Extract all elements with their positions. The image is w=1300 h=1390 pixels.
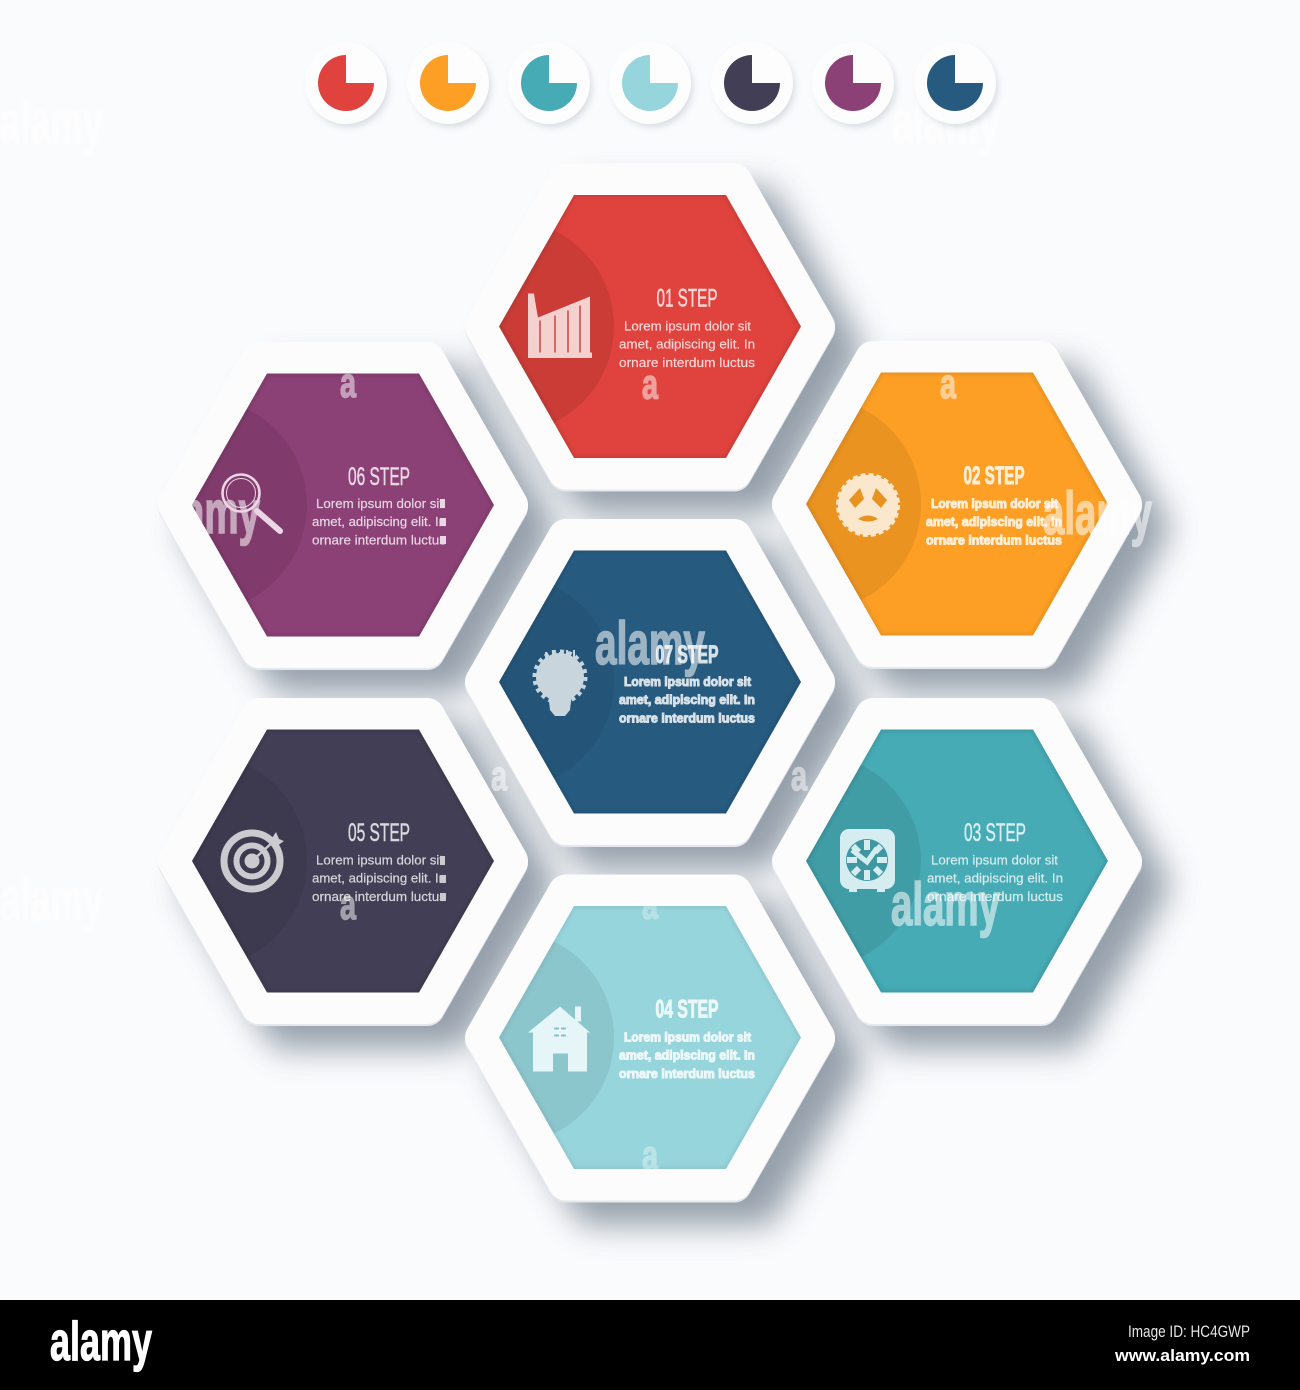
text: 01 description: amet, adipiscing elit. In — [619, 336, 755, 352]
legend: colored pie markers — [305, 42, 998, 127]
heading: 02 step: 02 STEP — [964, 462, 1024, 490]
text: 02 description: Lorem ipsum dolor sit — [931, 496, 1059, 511]
text: 05 description: amet, adipiscing elit. In — [312, 870, 446, 886]
text: 06 description: amet, adipiscing elit. In — [312, 514, 446, 529]
text: 05 description — [312, 852, 447, 904]
panel: 03 step (teal) — [707, 716, 1124, 1008]
text: 07 description — [619, 674, 755, 726]
panel: 04 step (light blue): a — [642, 880, 658, 928]
text: 01 description: Lorem ipsum dolor sit — [624, 318, 751, 334]
panel: 05 step (charcoal) — [93, 716, 510, 1008]
text: 03 description — [927, 852, 1064, 904]
icon: bar chart — [528, 294, 592, 358]
footer logo: alamy — [50, 1310, 152, 1372]
marker: purple — [812, 42, 894, 124]
text: 03 description: amet, adipiscing elit. In — [927, 870, 1063, 886]
watermarks over the layout: alamy — [891, 871, 1000, 938]
text: 05 description: Lorem ipsum dolor sit — [316, 852, 443, 868]
watermarks over the layout — [491, 480, 1152, 938]
marker: navy — [914, 42, 996, 124]
text: 03 description: Lorem ipsum dolor sit — [931, 852, 1058, 868]
heading: 05 step: 05 STEP — [348, 819, 410, 847]
icon: target with arrow — [224, 832, 284, 889]
watermarks over the layout: alamy — [1043, 480, 1152, 547]
text: 04 description: amet, adipiscing elit. In — [619, 1048, 755, 1062]
text: 07 description: ornare interdum luctus — [619, 710, 755, 726]
panel: 02 step (orange) — [707, 359, 1124, 651]
text: 02 description: amet, adipiscing elit. In — [926, 514, 1062, 529]
text: 04 description: ornare interdum luctus — [619, 1066, 755, 1081]
panel: 02 step (orange): a — [940, 360, 956, 407]
marker: teal — [508, 42, 590, 124]
footer bar — [0, 1300, 1300, 1390]
panel: 06 step (purple): alamy — [151, 479, 260, 546]
heading: 01 step: 01 STEP — [656, 284, 718, 312]
text: 05 description: ornare interdum luctus — [312, 889, 447, 904]
faint background watermarks — [0, 89, 1000, 933]
panel: 06 step (purple) — [93, 359, 510, 652]
panel: 07 step (navy) — [400, 537, 817, 829]
faint background watermarks: alamy — [0, 866, 103, 933]
text: 07 description: amet, adipiscing elit. In — [619, 692, 755, 707]
text: 02 description — [926, 496, 1062, 548]
faint background watermarks: alamy — [892, 89, 1000, 156]
text: 07 description: Lorem ipsum dolor sit — [624, 674, 752, 689]
heading: 04 step: 04 STEP — [656, 996, 718, 1024]
panel: 01 step (red) — [400, 182, 817, 474]
text: 04 description: Lorem ipsum dolor sit — [624, 1030, 752, 1044]
icon: light bulb — [534, 650, 586, 716]
marker: red — [305, 42, 387, 124]
text: 04 description — [619, 1030, 755, 1081]
icon: house — [528, 1006, 590, 1072]
icon: alarm clock — [840, 829, 895, 892]
watermarks over the layout: a — [791, 752, 807, 799]
faint background watermarks: alamy — [0, 89, 103, 156]
text: 01 description — [619, 318, 756, 370]
image id: Image ID: HC4GWP — [1128, 1322, 1250, 1341]
marker: light blue — [609, 42, 691, 124]
panel: 06 step (purple): a — [340, 359, 356, 406]
icon: magnifying glass — [222, 474, 280, 531]
watermark: alamy: alamy — [595, 610, 705, 677]
text: 02 description: ornare interdum luctus — [926, 532, 1062, 548]
text: 06 description — [312, 496, 447, 548]
panel: 04 step (light blue): a — [642, 1132, 658, 1178]
icon: wheel — [838, 474, 898, 536]
text: 06 description: Lorem ipsum dolor sit — [316, 496, 443, 511]
text: 01 description: ornare interdum luctus — [619, 355, 756, 370]
watermarks over the layout: a — [491, 752, 507, 799]
heading: 03 step: 03 STEP — [964, 819, 1026, 847]
site url: www.alamy.com — [1114, 1346, 1250, 1365]
heading: 07 step: 07 STEP — [656, 641, 718, 669]
heading: 06 step: 06 STEP — [348, 463, 410, 491]
panel: 04 step (light blue) — [400, 880, 817, 1184]
panel: 01 step (red): a — [642, 360, 658, 408]
text: 03 description: ornare interdum luctus — [927, 889, 1064, 904]
marker: orange — [407, 42, 489, 124]
text: 06 description: ornare interdum luctus — [312, 532, 447, 548]
panel: 05 step (charcoal): a — [340, 881, 356, 928]
marker: charcoal — [711, 42, 793, 124]
hexagon drop shadows — [202, 206, 1150, 1206]
